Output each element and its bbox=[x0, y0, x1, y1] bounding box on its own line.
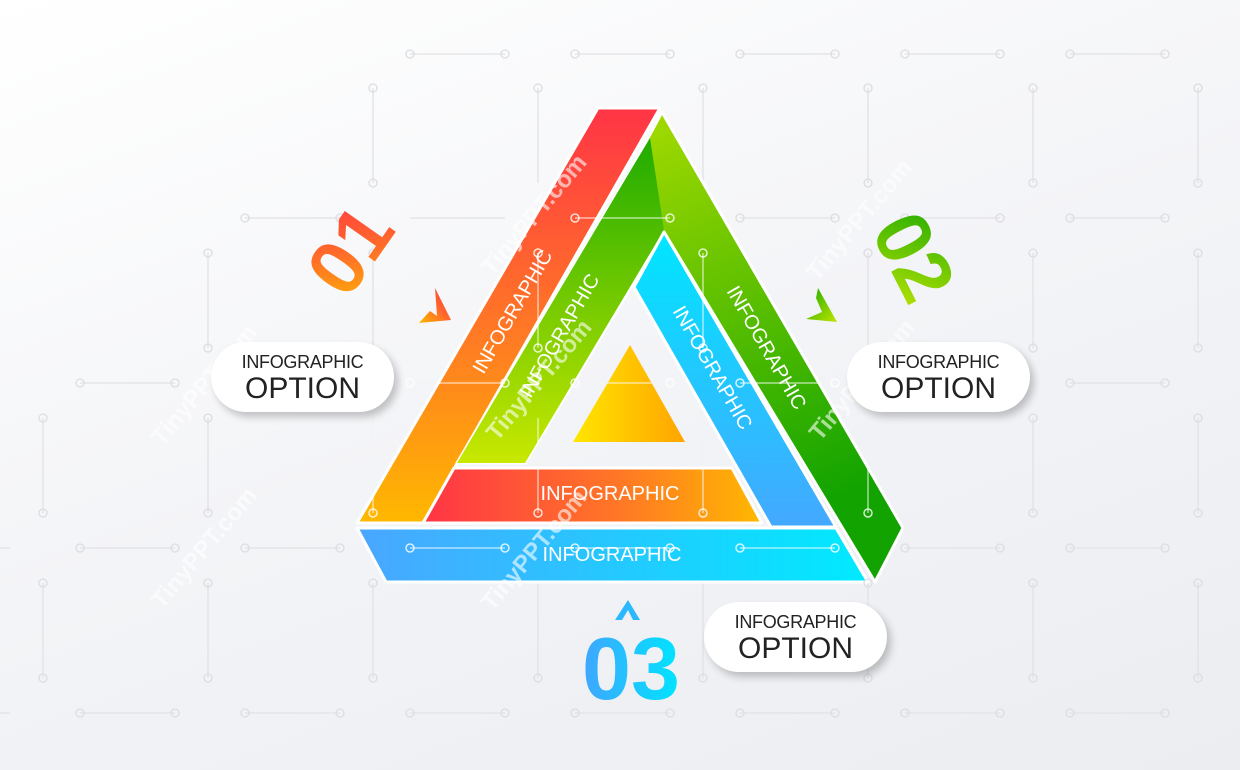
band: cyan leg bbox=[634, 232, 836, 527]
callout: option bottom bbox=[704, 602, 887, 672]
label: red bottom band: INFOGRAPHIC bbox=[541, 483, 679, 505]
label: cyan band: INFOGRAPHIC bbox=[668, 302, 756, 434]
band: green outer right bbox=[457, 112, 903, 582]
callout: option right bbox=[847, 342, 1030, 412]
watermarks: TinyPPT.com bbox=[804, 314, 920, 446]
band: green inner leg bbox=[457, 138, 664, 463]
icon: chevron left bbox=[419, 288, 451, 323]
number 03: 03 bbox=[582, 619, 680, 718]
icon: caret 03 bbox=[615, 600, 640, 620]
callout: option left bbox=[211, 342, 394, 412]
number 02: 02 bbox=[855, 198, 973, 316]
band labels bbox=[469, 246, 810, 566]
callout: option left: INFOGRAPHIC bbox=[242, 352, 363, 372]
band: red bottom inner bbox=[423, 468, 762, 523]
label: blue bottom band: INFOGRAPHIC bbox=[543, 544, 681, 566]
triangle graphic bbox=[357, 108, 903, 582]
watermarks: TinyPPT.com bbox=[476, 484, 592, 616]
callout: option bottom: OPTION bbox=[738, 632, 853, 665]
watermarks: TinyPPT.com bbox=[481, 314, 597, 446]
watermarks: TinyPPT.com bbox=[801, 154, 917, 286]
band: blue bottom bbox=[357, 528, 868, 582]
band: orange outer left bbox=[357, 108, 660, 523]
icon: chevron right bbox=[806, 288, 837, 322]
callout: option left: OPTION bbox=[245, 372, 360, 405]
label: lime band: INFOGRAPHIC bbox=[516, 270, 604, 402]
label: orange band: INFOGRAPHIC bbox=[469, 246, 557, 378]
watermarks: TinyPPT.com bbox=[146, 482, 262, 614]
watermarks bbox=[146, 149, 920, 616]
label: green band: INFOGRAPHIC bbox=[722, 282, 810, 414]
watermarks: TinyPPT.com bbox=[146, 319, 262, 451]
number 01: 01 bbox=[289, 189, 411, 311]
watermarks: TinyPPT.com bbox=[476, 149, 592, 281]
callout: option bottom: INFOGRAPHIC bbox=[735, 612, 856, 632]
callout: option right: OPTION bbox=[881, 372, 996, 405]
center triangle bbox=[573, 345, 685, 442]
callout: option right: INFOGRAPHIC bbox=[878, 352, 999, 372]
